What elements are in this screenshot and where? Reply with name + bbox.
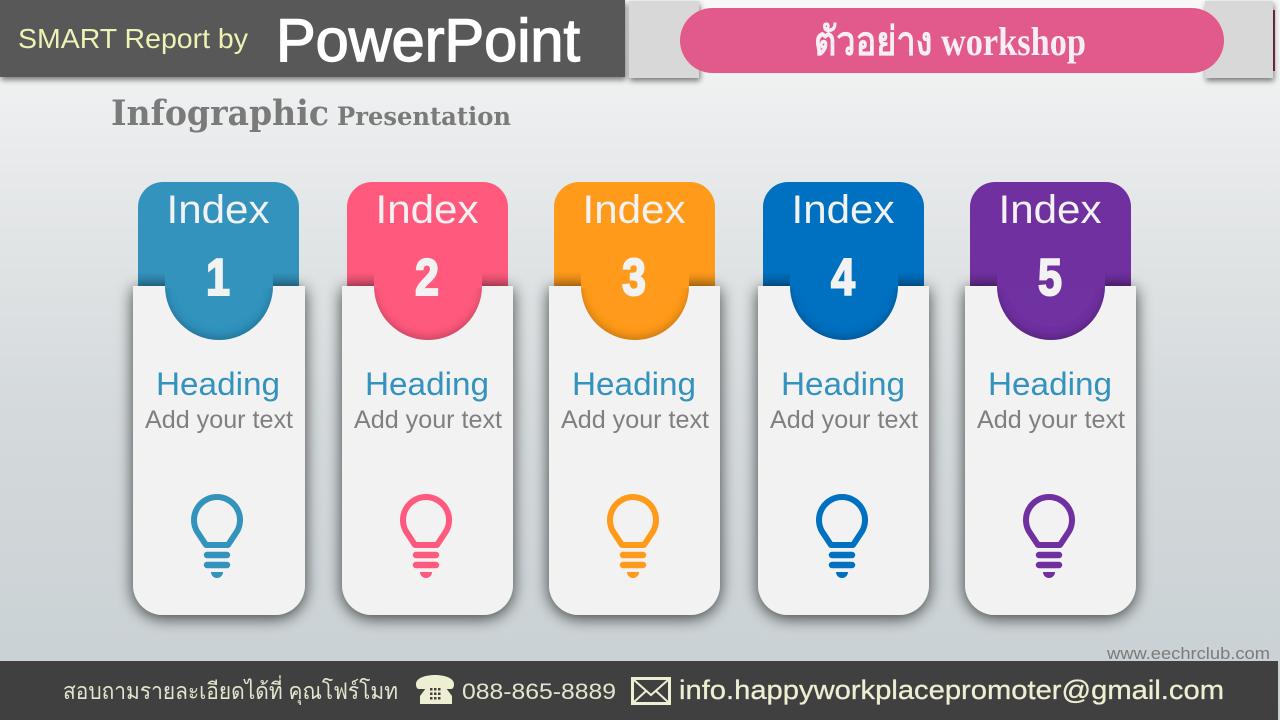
phone number: 088-865-8889 bbox=[462, 679, 616, 704]
footer bar bbox=[0, 661, 1278, 720]
body text: Add your text bbox=[561, 406, 709, 434]
card bbox=[965, 286, 1136, 615]
tab notch bbox=[581, 262, 689, 340]
subtitle bbox=[111, 93, 511, 134]
tab label: Index bbox=[998, 188, 1102, 232]
panel: index 3 bbox=[549, 182, 720, 615]
body text: Add your text bbox=[145, 406, 293, 434]
icon: telephone bbox=[416, 675, 454, 704]
icon: light bulb bbox=[819, 497, 865, 578]
body text: Add your text bbox=[977, 406, 1125, 434]
heading: Heading bbox=[572, 366, 696, 402]
card bbox=[549, 286, 720, 615]
header tagline: SMART Report by bbox=[18, 23, 248, 54]
heading: Heading bbox=[156, 366, 280, 402]
number: 5 bbox=[1038, 249, 1062, 307]
tab notch bbox=[790, 262, 898, 340]
card bbox=[133, 286, 305, 615]
card bbox=[342, 286, 513, 615]
card shadow on tab bbox=[763, 272, 924, 286]
icon: light bulb bbox=[403, 497, 449, 578]
tab bbox=[970, 182, 1131, 290]
subtitle: Presentation bbox=[337, 102, 511, 131]
panel: index 2 bbox=[342, 182, 513, 615]
icon: envelope bbox=[632, 678, 670, 704]
header brand: PowerPoint bbox=[276, 7, 580, 74]
number: 4 bbox=[831, 249, 855, 307]
body text: Add your text bbox=[770, 406, 918, 434]
workshop banner bbox=[629, 1, 1275, 78]
number: 2 bbox=[415, 249, 439, 307]
panel: index 4 bbox=[758, 182, 929, 615]
card shadow on tab bbox=[554, 272, 715, 286]
icon: light bulb bbox=[194, 497, 240, 578]
card bbox=[758, 286, 929, 615]
icon: light bulb bbox=[610, 497, 656, 578]
tab notch bbox=[374, 262, 482, 340]
tab notch bbox=[997, 262, 1105, 340]
tab label: Index bbox=[792, 188, 894, 232]
tab label: Index bbox=[582, 188, 686, 232]
card shadow on tab bbox=[347, 272, 508, 286]
header bar bbox=[0, 0, 625, 77]
number: 1 bbox=[206, 249, 230, 307]
panel: index 1 bbox=[133, 182, 305, 615]
heading: Heading bbox=[988, 366, 1112, 402]
heading: Heading bbox=[365, 366, 489, 402]
website url: www.eechrclub.com bbox=[1106, 644, 1270, 663]
panel: index 5 bbox=[965, 182, 1136, 615]
tab label: Index bbox=[166, 188, 270, 232]
tab bbox=[347, 182, 508, 290]
body text: Add your text bbox=[354, 406, 502, 434]
email address: info.happyworkplacepromoter@gmail.com bbox=[679, 675, 1224, 705]
subtitle: Infographic bbox=[111, 93, 329, 134]
number: 3 bbox=[622, 249, 646, 307]
tab bbox=[763, 182, 924, 290]
icon: light bulb bbox=[1026, 497, 1072, 578]
tab bbox=[554, 182, 715, 290]
card shadow on tab bbox=[138, 272, 299, 286]
contact prompt: สอบถามรายละเอียดได้ที่ คุณโฟร์โมท bbox=[63, 675, 398, 705]
banner title: ตัวอย่าง workshop bbox=[814, 19, 1086, 64]
card shadow on tab bbox=[970, 272, 1131, 286]
heading: Heading bbox=[781, 366, 905, 402]
tab notch bbox=[165, 262, 273, 340]
tab bbox=[138, 182, 299, 290]
tab label: Index bbox=[376, 188, 478, 232]
